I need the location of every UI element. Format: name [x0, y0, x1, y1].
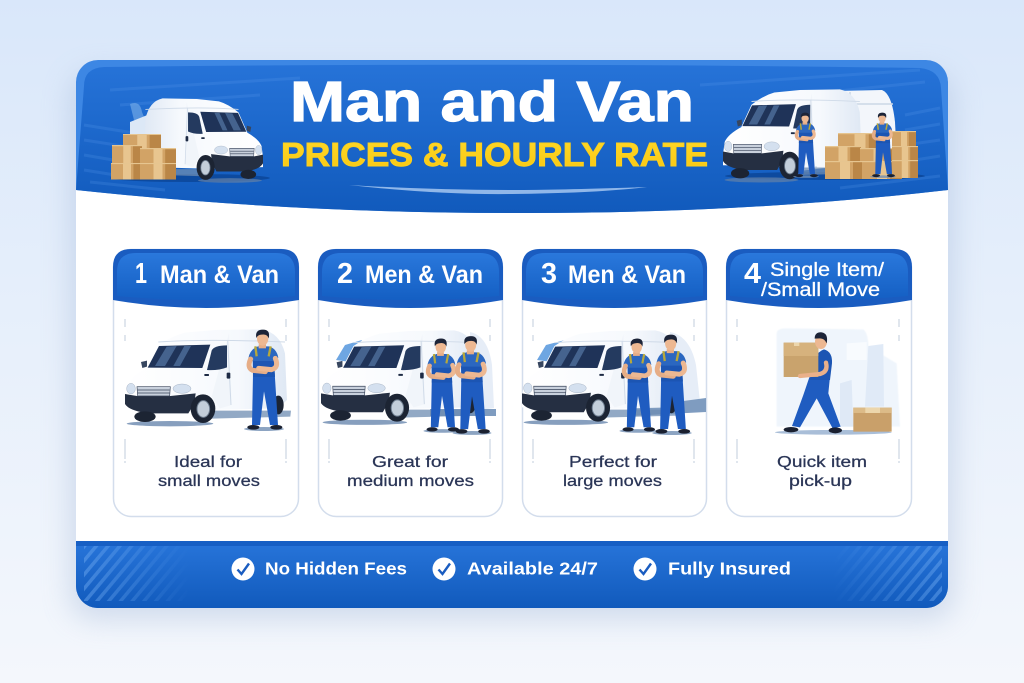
caption: Quick item	[777, 454, 867, 471]
card header: /Small Move	[761, 279, 880, 301]
caption	[563, 454, 662, 490]
badge: fully insured: Fully Insured	[668, 558, 791, 578]
badge: fully insured	[634, 558, 791, 580]
footer bar	[76, 541, 948, 608]
card header: 2	[337, 258, 353, 290]
caption: pick-up	[789, 473, 852, 490]
caption	[158, 454, 260, 490]
caption: medium moves	[347, 473, 474, 490]
card header: 4	[744, 258, 761, 290]
caption: small moves	[158, 473, 260, 490]
card header: Men & Van	[568, 261, 686, 289]
title: Man and Van	[290, 70, 694, 134]
badge: no hidden fees	[232, 558, 407, 580]
illustration: van with two workers	[522, 330, 706, 435]
card header	[726, 249, 912, 308]
card header	[113, 249, 299, 308]
card header: Men & Van	[365, 261, 483, 289]
card header: Man & Van	[160, 261, 279, 289]
badge: no hidden fees: No Hidden Fees	[265, 558, 407, 578]
badge: available 24/7: Available 24/7	[467, 558, 598, 578]
illustration: van with one worker	[125, 329, 291, 431]
panel: 4 Single Item	[726, 249, 912, 516]
panel: 2 Men & Van	[318, 249, 503, 516]
caption: Ideal for	[174, 454, 242, 471]
card header: 3	[541, 258, 557, 290]
card header	[522, 249, 707, 308]
badge: available 24/7	[432, 558, 598, 580]
panel: 3 Men & Van	[522, 249, 707, 516]
card header: Single Item/	[770, 259, 885, 281]
illustration: header left van with boxes	[110, 98, 270, 183]
swoosh	[349, 185, 647, 194]
header banner	[76, 50, 948, 213]
subtitle: PRICES & HOURLY RATE	[281, 136, 708, 173]
caption	[777, 454, 867, 490]
caption	[347, 454, 474, 490]
illustration: header right van with two workers and boxes	[723, 89, 925, 182]
card header	[318, 249, 503, 308]
caption: large moves	[563, 473, 662, 490]
card header: 1	[135, 258, 147, 290]
panel: 1 Man & Van	[113, 249, 299, 516]
caption: Perfect for	[569, 454, 657, 471]
caption: Great for	[372, 454, 448, 471]
main panel	[76, 50, 948, 608]
card shadow	[70, 72, 954, 620]
illustration: van with two workers	[321, 330, 496, 435]
illustration: worker carrying box	[775, 328, 900, 435]
